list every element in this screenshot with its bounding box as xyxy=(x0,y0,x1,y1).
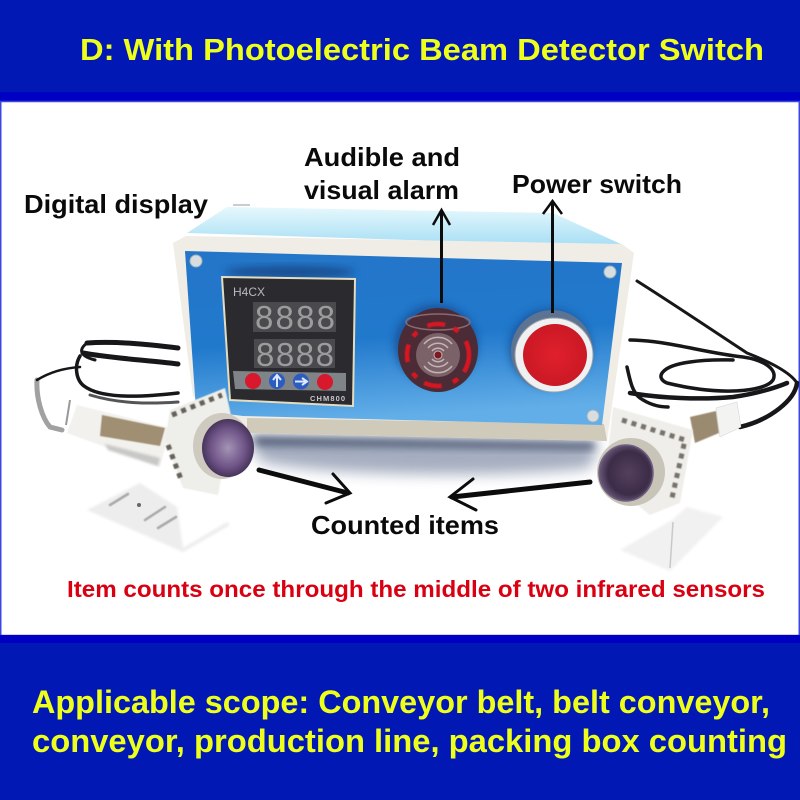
lens xyxy=(597,438,665,506)
label: audible and visual alarm: Audible and xyxy=(304,142,460,172)
panel: bottom banner xyxy=(0,635,800,800)
label: audible and visual alarm: visual alarm xyxy=(304,175,459,205)
illustration: control box xyxy=(173,207,634,441)
sensor barrel xyxy=(690,411,719,443)
arrow: right sensor to counted items xyxy=(450,479,590,510)
panel screws xyxy=(190,255,616,422)
text: applicable scope xyxy=(32,684,787,759)
lens xyxy=(193,413,251,479)
sensor base bracket xyxy=(620,507,723,571)
sensor barrel xyxy=(67,405,170,467)
box lid xyxy=(187,207,623,246)
title: D: With Photoelectric Beam Detector Switch xyxy=(80,32,764,67)
text: applicable scope: conveyor, production line, packing box counting xyxy=(32,723,787,759)
illustration: right sensor xyxy=(597,402,741,571)
label: audible and visual alarm xyxy=(304,142,460,205)
upper readout xyxy=(253,302,336,332)
power switch xyxy=(508,308,593,392)
arrow: to alarm xyxy=(433,210,450,303)
audible and visual alarm xyxy=(394,304,478,392)
digital display unit: 8888 xyxy=(255,299,335,336)
sensor base bracket xyxy=(87,483,230,552)
box frame xyxy=(173,236,634,441)
panel: photo area xyxy=(1,102,799,636)
illustration: cables behind the unit, left xyxy=(37,342,178,430)
illustration: left sensor xyxy=(66,388,254,552)
lower readout xyxy=(254,339,335,368)
small mark behind the lid xyxy=(233,204,250,206)
label: power switch: Power switch xyxy=(512,169,682,199)
text: applicable scope: Applicable scope: Conveyor belt, belt conveyor, xyxy=(32,684,770,720)
arrow: left sensor to counted items xyxy=(259,470,350,503)
model label: H4CX xyxy=(233,285,265,299)
button strip xyxy=(233,371,346,391)
model number: CHM800 xyxy=(310,394,345,403)
panel: top banner xyxy=(0,0,800,102)
blue front panel xyxy=(185,251,622,425)
note: counting explanation: Item counts once through the middle of two infrared sensors xyxy=(67,576,765,602)
illustration: cables behind the unit, right xyxy=(627,281,797,427)
arrow: to power switch xyxy=(543,201,562,313)
illustration: shadow under the unit xyxy=(245,436,600,474)
digital display unit xyxy=(222,266,355,406)
mounting plate xyxy=(605,407,693,515)
digital display unit: 8888 xyxy=(256,336,334,373)
label: counted items: Counted items xyxy=(311,510,499,540)
label: digital display: Digital display xyxy=(24,189,209,219)
mounting plate xyxy=(165,388,232,495)
